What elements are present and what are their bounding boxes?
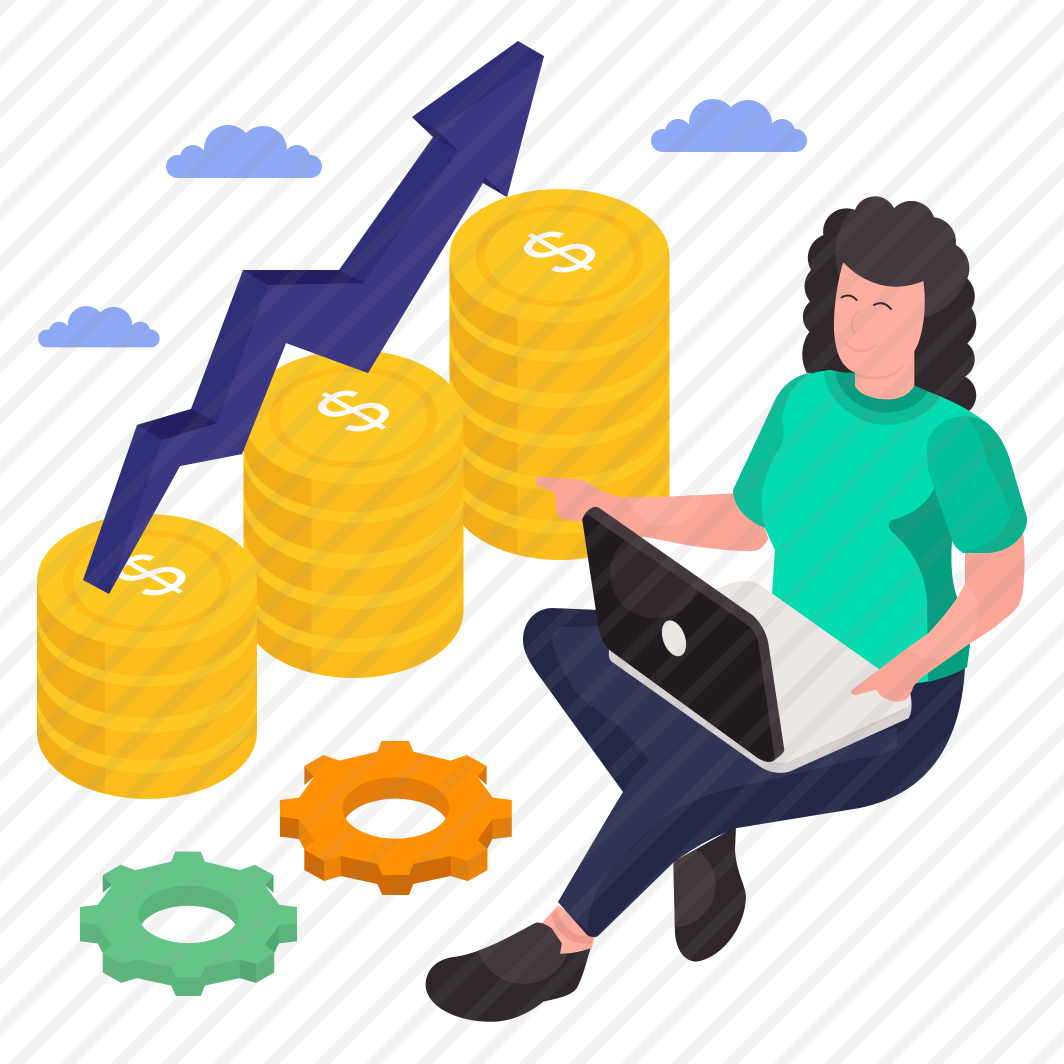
left arm pointing	[536, 476, 768, 552]
right sleeve	[927, 416, 1027, 553]
right arm on laptop	[851, 533, 1025, 702]
coin stack: tall right: $	[497, 216, 622, 288]
icon: orange gear	[280, 741, 512, 895]
coin stack: middle: $	[291, 375, 416, 447]
back shoe	[673, 828, 746, 962]
icon: cloud left	[38, 306, 160, 347]
coin stack: middle	[244, 350, 464, 678]
laptop	[582, 507, 912, 773]
coin stack: short left: $	[88, 539, 213, 611]
trousers	[523, 608, 965, 937]
icon: cloud top right	[651, 99, 807, 152]
icon: cloud top left	[166, 125, 322, 178]
neck, collar and face	[824, 262, 940, 425]
coin stack: short left	[37, 514, 257, 799]
ankle and front shoe	[426, 905, 594, 1022]
arrow: rising zig-zag	[83, 41, 544, 594]
coin stack: tall right	[450, 189, 670, 560]
shirt	[733, 370, 987, 700]
hair	[802, 185, 976, 412]
icon: green gear	[80, 852, 297, 996]
